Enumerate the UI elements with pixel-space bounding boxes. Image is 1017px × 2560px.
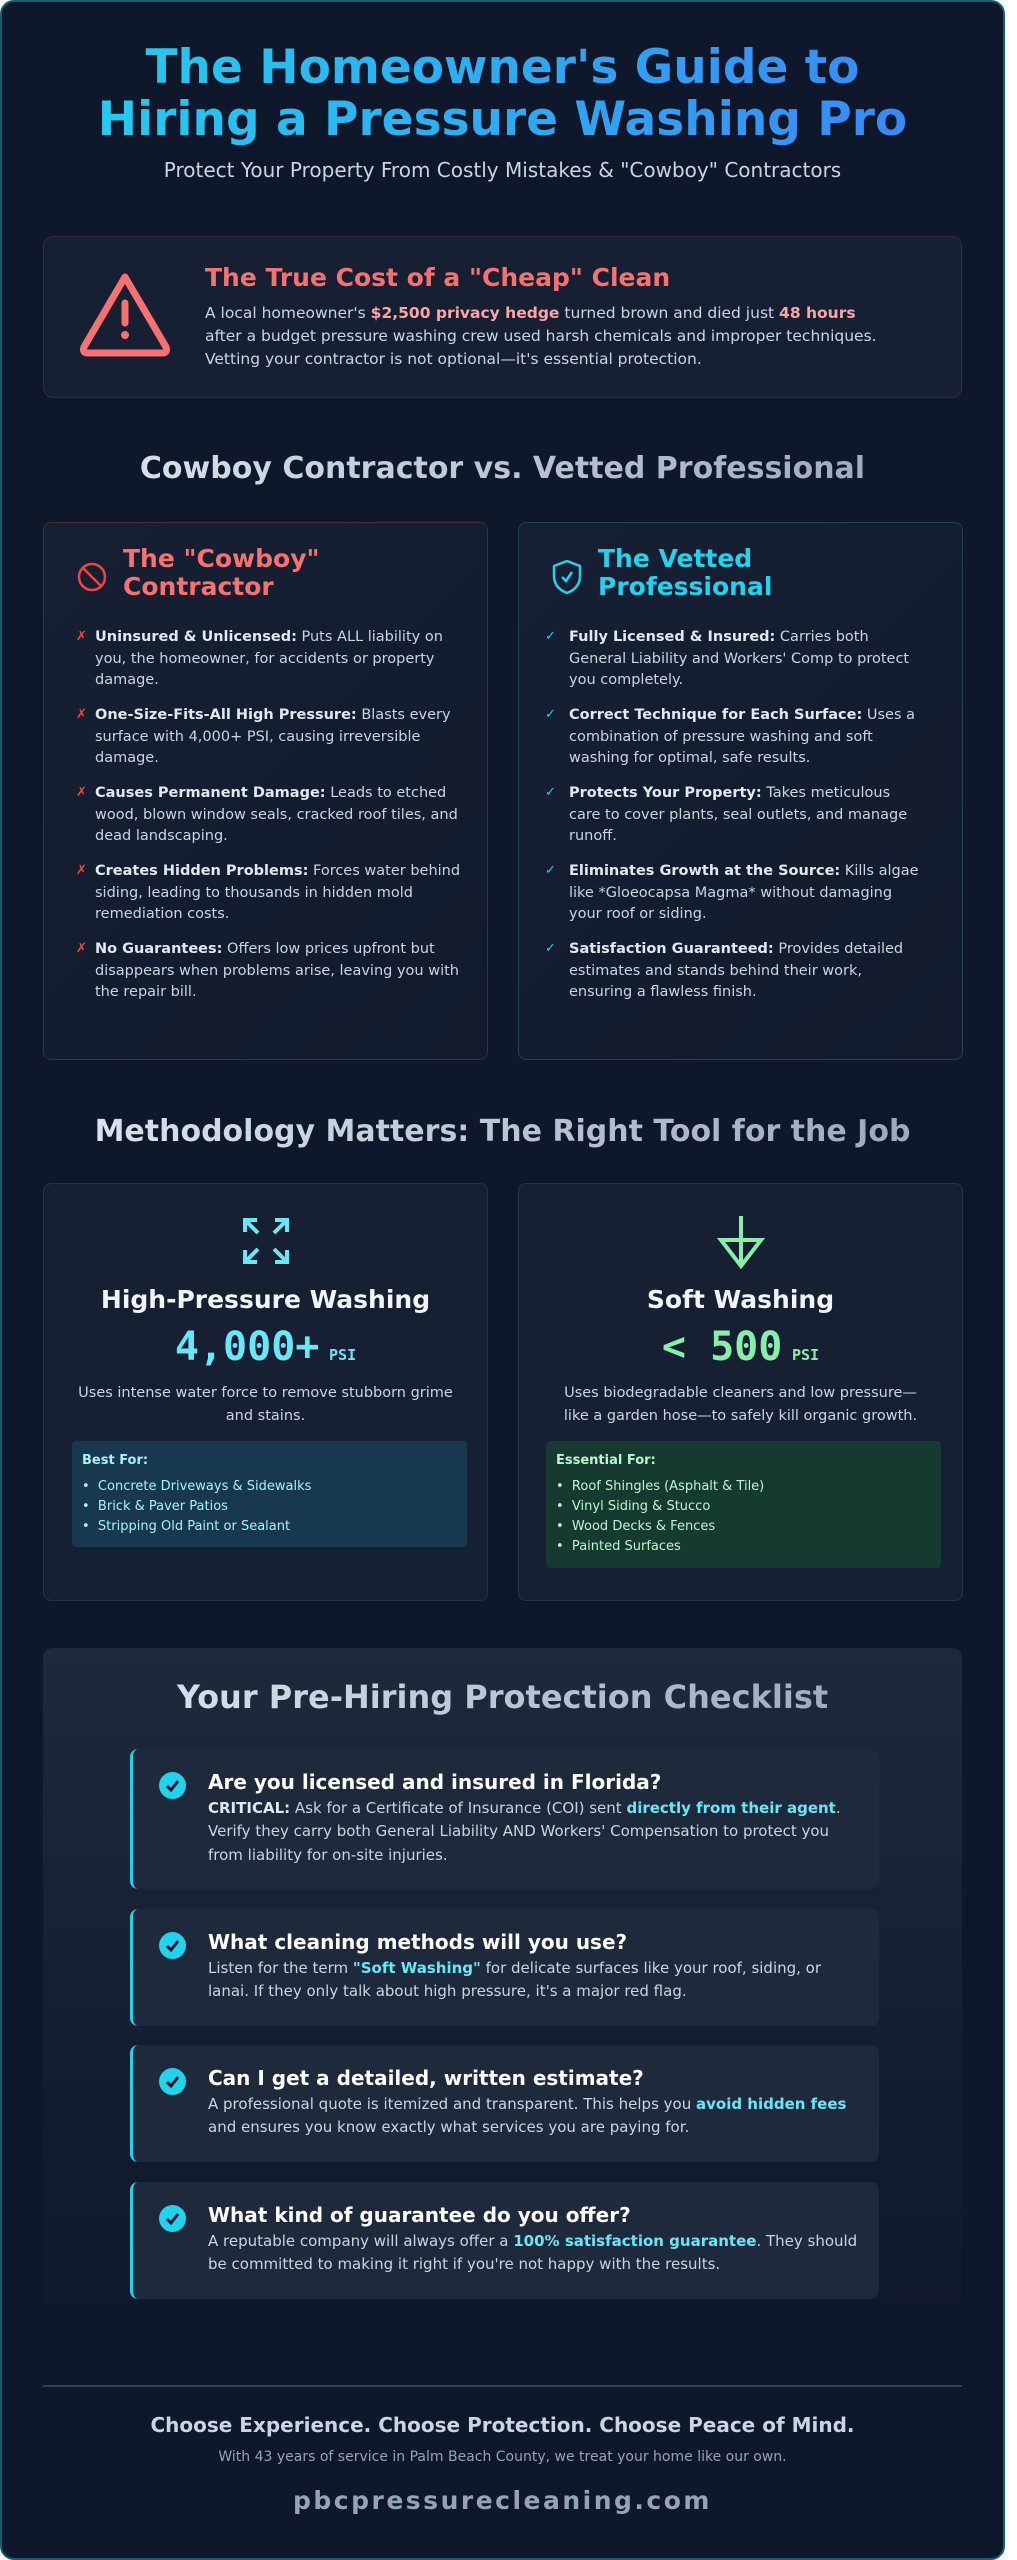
footer website: pbcpressurecleaning.com (293, 2486, 712, 2515)
checklist item 3 (130, 2045, 879, 2162)
checklist item 2 (130, 1909, 879, 2026)
cowboy items: ✗ (76, 863, 87, 878)
hp description: Uses intense water force to remove stubborn grime (78, 1385, 453, 1401)
cowboy items: One-Size-Fits-All High Pressure: Blasts every surface with 4,000+ PSI, causing irreversible damage. (95, 707, 451, 766)
cowboy items: ✗ (76, 707, 87, 722)
cowboy items: Causes Permanent Damage: Leads to etched wood, blown window seals, cracked roof tiles, and dead landscaping. (95, 785, 458, 844)
vetted items: ensuring a flawless finish. (569, 984, 757, 1000)
soft description: like a garden hose—to safely kill organic growth. (564, 1408, 917, 1424)
soft essential box: • Wood Decks & Fences (556, 1519, 715, 1534)
checklist item 1: CRITICAL: Ask for a Certificate of Insurance (COI) sent directly from their agent. Verify they carry both General Liability AND Workers' Compensation to protect you from liability for on-site injuries. (208, 1799, 841, 1864)
vetted items: ✓ (545, 707, 556, 722)
cowboy items (76, 629, 460, 1000)
cowboy items: Uninsured & Unlicensed: Puts ALL liability on you, the homeowner, for accidents or property damage. (95, 629, 443, 688)
hp best for box: Best For: (82, 1453, 148, 1468)
vetted items: runoff. (569, 828, 617, 844)
checklist item 4: A reputable company will always offer a 100% satisfaction guarantee. They should be committed to making it right if you're not happy with the results. (208, 2232, 857, 2273)
soft psi: < 500 PSI (662, 1324, 819, 1370)
vetted items: Protects Your Property: Takes meticulous (569, 785, 890, 801)
panel: high-pressure washing (43, 1183, 488, 1601)
vetted items: you completely. (569, 672, 683, 688)
hp best for box: • Brick & Paver Patios (82, 1499, 228, 1514)
soft essential box: Essential For: (556, 1453, 656, 1468)
checklist item 3: A professional quote is itemized and transparent. This helps you avoid hidden fees and ensures you know exactly what services you are paying for. (208, 2095, 846, 2136)
alert body (205, 304, 877, 368)
vetted heading: The Vetted (598, 544, 752, 573)
hp psi: 4,000+ PSI (175, 1324, 356, 1370)
vetted items: ✓ (545, 863, 556, 878)
soft description: Uses biodegradable cleaners and low pressure— (564, 1385, 917, 1401)
heading: comparison: Cowboy Contractor vs. Vetted Professional (140, 451, 865, 486)
icon: warning triangle (80, 274, 170, 356)
vetted heading: Professional (598, 572, 772, 601)
icon: prohibited (78, 562, 106, 592)
vetted items: washing for optimal, safe results. (569, 750, 810, 766)
vetted heading (598, 544, 772, 601)
vetted items (545, 629, 918, 1000)
panel: cowboy contractor (43, 522, 488, 1060)
checklist item 4: What kind of guarantee do you offer? (208, 2203, 631, 2227)
vetted items: ✓ (545, 785, 556, 800)
vetted items: Satisfaction Guaranteed: Provides detailed (569, 941, 903, 957)
checklist item 4 (130, 2182, 879, 2299)
icon: expand arrows (243, 1218, 289, 1264)
alert body: after a budget pressure washing crew used harsh chemicals and improper techniques. (205, 327, 877, 345)
panel: soft washing (518, 1183, 963, 1601)
vetted items: Correct Technique for Each Surface: Uses a (569, 707, 915, 723)
vetted items: Fully Licensed & Insured: Carries both (569, 629, 869, 645)
vetted items: like *Gloeocapsa Magma* without damaging (569, 885, 892, 901)
alert body: Vetting your contractor is not optional—it's essential protection. (205, 350, 702, 368)
hp best for box: • Concrete Driveways & Sidewalks (82, 1479, 311, 1494)
alert heading: The True Cost of a "Cheap" Clean (205, 263, 670, 292)
checklist item 2: What cleaning methods will you use? (208, 1930, 627, 1954)
hp description: and stains. (226, 1408, 305, 1424)
title (2, 42, 1003, 146)
vetted items: ✓ (545, 629, 556, 644)
checklist item 2: Listen for the term "Soft Washing" for delicate surfaces like your roof, siding, or lanai. If they only talk about high pressure, it's a major red flag. (208, 1959, 821, 2000)
soft heading: Soft Washing (647, 1285, 834, 1314)
panel: vetted professional (518, 522, 963, 1060)
cowboy items: ✗ (76, 629, 87, 644)
icon: check (159, 1932, 186, 1959)
icon: check (159, 2205, 186, 2232)
soft essential box: • Vinyl Siding & Stucco (556, 1499, 710, 1514)
vetted items: care to cover plants, seal outlets, and manage (569, 807, 907, 823)
vetted items: estimates and stands behind their work, (569, 963, 862, 979)
panel: checklist (43, 1648, 962, 2320)
soft essential box: • Painted Surfaces (556, 1539, 681, 1554)
title: Hiring a Pressure Washing Pro (98, 92, 907, 147)
subtitle: Protect Your Property From Costly Mistakes & "Cowboy" Contractors (164, 158, 841, 182)
footer subtext: With 43 years of service in Palm Beach County, we treat your home like our own. (218, 2449, 787, 2465)
checklist item 1 (130, 1749, 879, 1889)
cowboy heading: Contractor (123, 572, 274, 601)
cowboy heading: The "Cowboy" (123, 544, 320, 573)
vetted items: General Liability and Workers' Comp to protect (569, 651, 909, 667)
alert body: A local homeowner's $2,500 privacy hedge turned brown and died just 48 hours (205, 304, 856, 322)
icon: down arrow (717, 1216, 765, 1270)
title: The Homeowner's Guide to (146, 40, 859, 95)
checklist item 1: Are you licensed and insured in Florida? (208, 1770, 661, 1794)
footer tagline: Choose Experience. Choose Protection. Choose Peace of Mind. (150, 2413, 855, 2437)
vetted items: Eliminates Growth at the Source: Kills algae (569, 863, 918, 879)
checklist heading: Your Pre-Hiring Protection Checklist (177, 1678, 828, 1716)
icon: check (159, 1772, 186, 1799)
hp description (78, 1385, 453, 1424)
hp best for box: • Stripping Old Paint or Sealant (82, 1519, 290, 1534)
cowboy heading (123, 544, 320, 601)
icon: shield check (552, 560, 582, 594)
vetted items: combination of pressure washing and soft (569, 729, 873, 745)
soft description (564, 1385, 917, 1424)
cowboy items: ✗ (76, 941, 87, 956)
icon: check (159, 2068, 186, 2095)
soft essential box: • Roof Shingles (Asphalt & Tile) (556, 1479, 764, 1494)
cowboy items: Creates Hidden Problems: Forces water behind siding, leading to thousands in hidden mold remediation costs. (95, 863, 460, 922)
heading: methodology: Methodology Matters: The Right Tool for the Job (95, 1114, 910, 1149)
hp best for box (72, 1441, 467, 1547)
checklist item 3: Can I get a detailed, written estimate? (208, 2066, 644, 2090)
soft essential box (546, 1441, 941, 1568)
cowboy items: No Guarantees: Offers low prices upfront but disappears when problems arise, leaving you with the repair bill. (95, 941, 459, 1000)
hp heading: High-Pressure Washing (101, 1285, 430, 1314)
alert: true cost (43, 236, 962, 398)
cowboy items: ✗ (76, 785, 87, 800)
vetted items: ✓ (545, 941, 556, 956)
vetted items: your roof or siding. (569, 906, 707, 922)
